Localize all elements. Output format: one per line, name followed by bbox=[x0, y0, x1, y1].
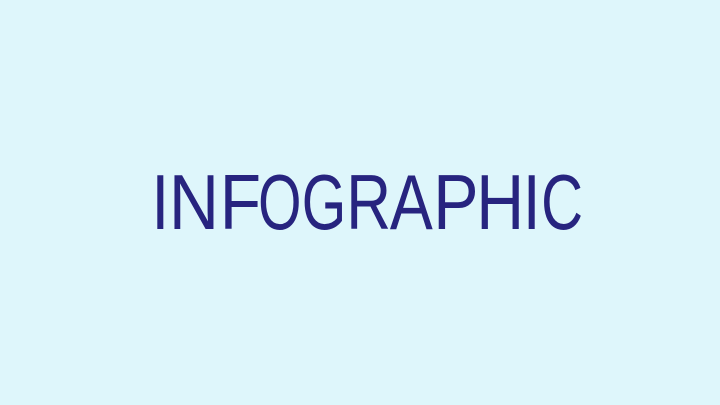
title: R bbox=[346, 160, 391, 246]
title: H bbox=[476, 160, 524, 246]
title: O bbox=[258, 160, 301, 246]
title: F bbox=[220, 160, 261, 246]
title: G bbox=[302, 160, 346, 246]
title: I bbox=[523, 160, 541, 246]
title: N bbox=[169, 160, 219, 246]
title: A bbox=[390, 160, 433, 246]
title: I bbox=[151, 160, 169, 246]
title: C bbox=[541, 160, 583, 246]
title: P bbox=[433, 160, 479, 246]
